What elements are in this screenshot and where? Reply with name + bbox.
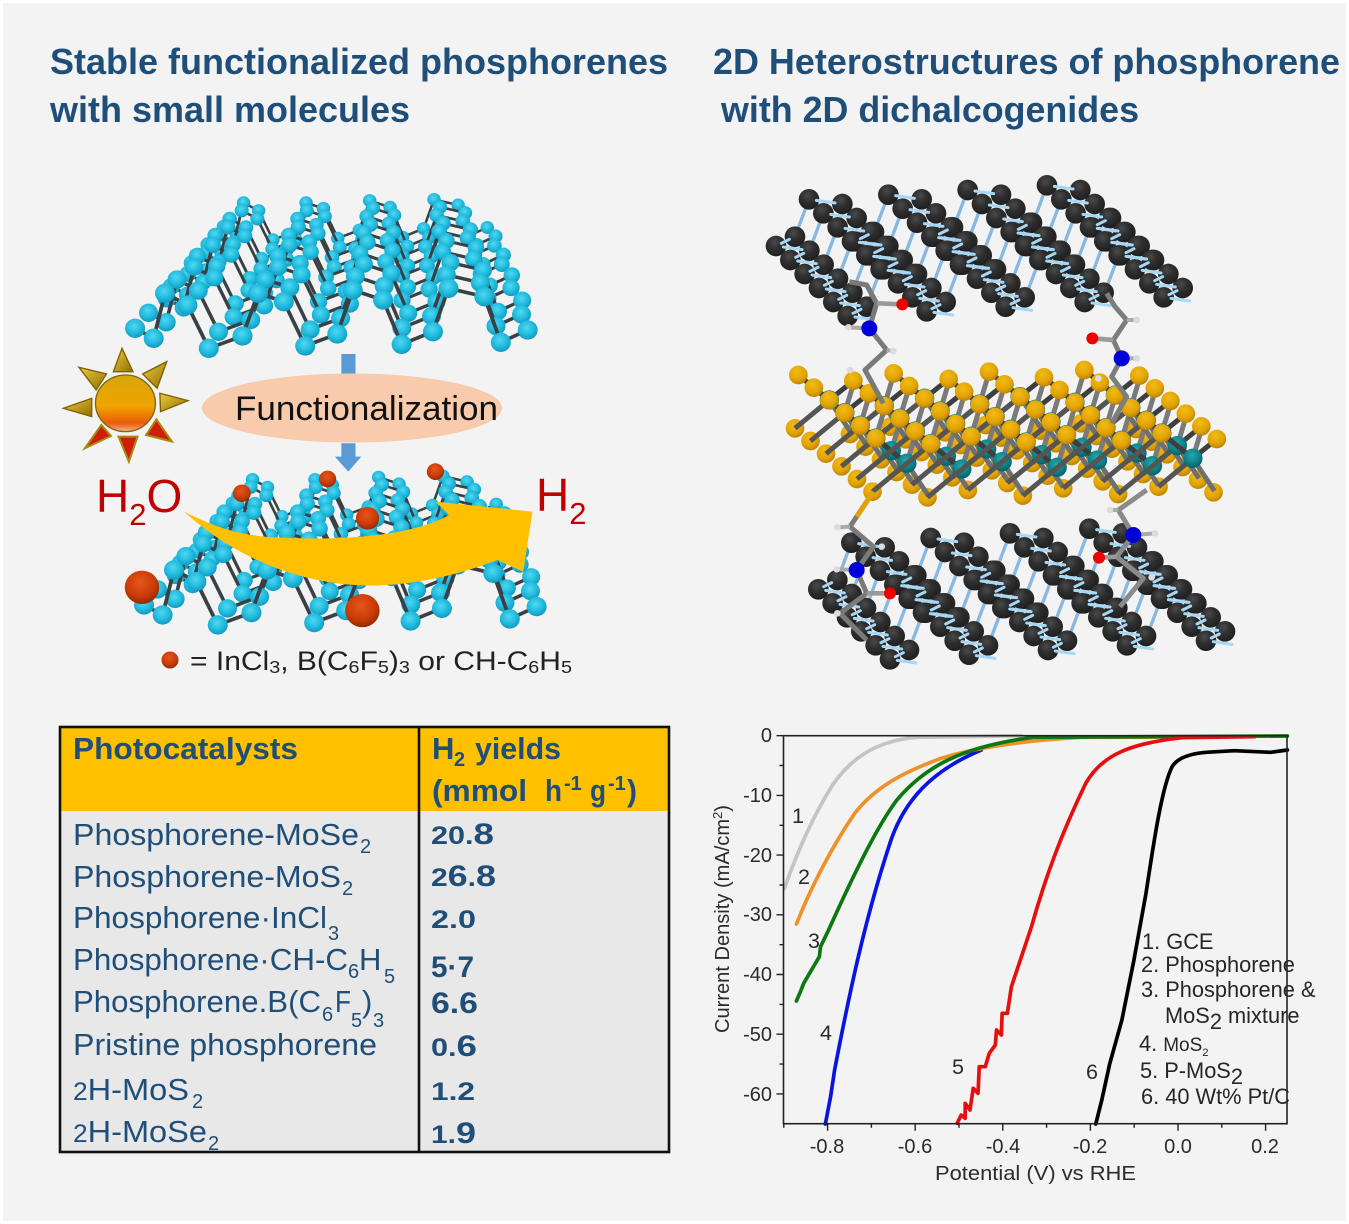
row: Phosphorene.B(C6F5)3: ): [362, 984, 372, 1019]
row: Phosphorene-MoSe2: Phosphorene-MoSe: [73, 817, 359, 852]
MoS2 layer: [786, 361, 1226, 507]
table header: (mmol: [432, 773, 527, 808]
label: functionalization ellipse: [202, 374, 502, 442]
curve 4: MoS2: [825, 750, 981, 1124]
row: Phosphorene-MoS2: 2: [342, 878, 353, 900]
curve number labels: 6: [1086, 1060, 1098, 1084]
curve 1: GCE: [784, 736, 1021, 888]
row: Phosphorene.B(C6F5)3: [73, 984, 478, 1032]
row: Phosphorene-MoS2: [73, 859, 496, 900]
legend: red sphere molecules: 3: [399, 657, 410, 677]
chart legend: mixture: [1222, 1003, 1299, 1028]
table frame: [60, 727, 669, 1152]
bottom phosphorene sheet: [808, 518, 1235, 670]
legend: red sphere molecules: = InCl: [190, 646, 260, 676]
row: Phosphorene-MoSe2: 2: [360, 836, 371, 858]
y axis labels: -10: [743, 785, 772, 807]
row: Phosphorene CH-C6H5: Phosphorene·CH-C: [73, 942, 348, 977]
curve number labels: 4: [820, 1021, 832, 1045]
arrow: water to hydrogen: [184, 502, 533, 586]
row: Phosphorene InCl3: Phosphorene·InCl: [73, 900, 327, 935]
x axis labels: -0.6: [898, 1136, 932, 1158]
legend: red sphere molecules: ): [389, 646, 399, 676]
table header: H: [432, 731, 454, 766]
chart legend: 3. Phosphorene &: [1141, 977, 1316, 1002]
row: Phosphorene-MoS2: 26.8: [431, 860, 496, 893]
label: H2O: 2: [129, 497, 146, 532]
row: 2H-MoS2: 2: [192, 1091, 203, 1113]
row: Phosphorene-MoS2: Phosphorene-MoS: [73, 859, 341, 894]
x axis labels: -0.2: [1073, 1136, 1107, 1158]
label: H2: H: [536, 469, 569, 521]
chart: current density vs potential: [710, 725, 1316, 1185]
y axis labels: -20: [743, 845, 772, 867]
curve number labels: 1: [792, 804, 804, 828]
curve 6: Pt/C: [1096, 750, 1287, 1124]
curves: [784, 736, 1287, 1124]
title: right heading: 2D Heterostructures of phosphorene: [713, 41, 1340, 82]
row: Pristine phosphorene: 0.6: [431, 1030, 477, 1063]
y axis labels: -40: [743, 964, 772, 986]
row: Phosphorene CH-C6H5: [73, 942, 474, 988]
x axis labels: -0.8: [810, 1136, 844, 1158]
pristine phosphorene sheet: [125, 193, 538, 358]
label: functionalization ellipse: Functionalization: [235, 390, 498, 428]
row: 2H-MoSe2: 2: [208, 1133, 219, 1155]
linker molecules: upper: [845, 282, 1140, 423]
legend: red sphere molecules: , B(C: [280, 646, 349, 676]
row: Phosphorene.B(C6F5)3: 6: [322, 1004, 333, 1026]
row: Pristine phosphorene: Pristine phosphorene: [73, 1027, 377, 1062]
curve number labels: 3: [808, 929, 820, 953]
row: Phosphorene CH-C6H5: 5·7: [431, 951, 474, 984]
row: Phosphorene.B(C6F5)3: F: [335, 984, 351, 1019]
title: left heading: [49, 41, 668, 130]
legend: red sphere molecules: 6: [349, 657, 360, 677]
y axis title: ): [712, 805, 734, 812]
table header: 2: [454, 749, 465, 771]
row: 2H-MoS2: 2H-MoS: [73, 1072, 189, 1107]
x axis labels: -0.4: [986, 1136, 1020, 1158]
row: 2H-MoS2: 1.2: [431, 1078, 475, 1106]
chart legend: 1. GCE: [1142, 929, 1213, 954]
y axis labels: [743, 725, 772, 1106]
legend: red sphere molecules: or CH-C: [410, 646, 528, 676]
curve number labels: 2: [798, 865, 810, 889]
row: 2H-MoSe2: [73, 1114, 476, 1155]
legend: red sphere molecules: 5: [561, 657, 572, 677]
panel: functionalization schematic: [63, 193, 586, 677]
row: Phosphorene.B(C6F5)3: Phosphorene.B(C: [73, 984, 321, 1019]
x axis title: Potential (V) vs RHE: [935, 1163, 1136, 1185]
chart legend: 2. Phosphorene: [1141, 952, 1295, 977]
chart legend: MoS: [1165, 1003, 1210, 1028]
table header: [60, 727, 669, 811]
row: 2H-MoSe2: 2H-MoSe: [73, 1114, 207, 1149]
table header: g: [590, 773, 606, 808]
y axis labels: -50: [743, 1024, 772, 1046]
x axis labels: 0.2: [1251, 1136, 1279, 1158]
y axis labels: -60: [743, 1084, 772, 1106]
row: Phosphorene.B(C6F5)3: 3: [373, 1010, 384, 1032]
x axis labels: [810, 1136, 1279, 1158]
row: 2H-MoS2: [73, 1072, 475, 1113]
curve 2: phosphorene: [796, 737, 1254, 924]
row: Phosphorene InCl3: 3: [328, 923, 339, 945]
y axis labels: 0: [761, 725, 772, 747]
label: H2O: O: [146, 470, 182, 522]
row: Phosphorene-MoSe2: 20. 8: [431, 818, 494, 851]
table body background: [60, 727, 669, 1152]
table header: ): [627, 773, 637, 808]
legend: red sphere molecules: H: [539, 646, 561, 676]
chart legend: 6. 40 Wt% Pt/C: [1141, 1084, 1290, 1109]
table header: -1: [608, 773, 626, 795]
legend: red sphere molecules: 3: [269, 657, 280, 677]
title: right heading: with 2D dichalcogenides: [720, 89, 1139, 130]
row: Phosphorene.B(C6F5)3: 6.6: [431, 987, 478, 1020]
table: photocatalyst hydrogen yields: [60, 727, 669, 1155]
y axis labels: -30: [743, 904, 772, 926]
curve 5: P-MoS2: [957, 737, 1254, 1123]
row: Phosphorene InCl3: [73, 900, 476, 945]
table header: yields: [475, 731, 561, 766]
row: Phosphorene CH-C6H5: 6: [348, 961, 359, 983]
y axis title: 2: [710, 812, 725, 819]
functionalized phosphorene sheet: [125, 463, 547, 635]
y axis title: Current Density (mA/cm: [712, 820, 734, 1033]
top phosphorene sheet: [766, 175, 1193, 326]
legend: red sphere molecules: 6: [528, 657, 539, 677]
curve 3: mixture: [796, 736, 1287, 1001]
table header: h: [545, 773, 562, 808]
table header: -1: [564, 773, 582, 795]
title: left heading: with small molecules: [49, 89, 410, 130]
axes: [776, 736, 1287, 1131]
chart legend: 2: [1202, 1047, 1208, 1059]
legend: red sphere molecules: [162, 646, 572, 677]
label: H2: 2: [569, 496, 586, 531]
chart legend: [1139, 929, 1316, 1109]
title: right heading: [713, 41, 1340, 130]
chart legend: 5. P-MoS: [1140, 1058, 1231, 1083]
row: Phosphorene CH-C6H5: 5: [384, 966, 395, 988]
legend: red sphere molecules: F: [360, 646, 378, 676]
row: Phosphorene InCl3: 2.0: [431, 906, 476, 934]
row: Phosphorene CH-C6H5: H: [359, 942, 381, 977]
icon: sun: [63, 348, 188, 462]
row: Phosphorene.B(C6F5)3: 5: [351, 1010, 362, 1032]
chart legend: 2: [1210, 1009, 1222, 1034]
chart legend: 4. MoS: [1139, 1031, 1202, 1056]
arrow: functionalization: [335, 354, 361, 472]
label: H2O: H: [96, 470, 129, 522]
curve number labels: [792, 804, 1098, 1084]
title: left heading: Stable functionalized phosphorenes: [50, 41, 668, 82]
chart legend: 2: [1231, 1064, 1243, 1089]
row: 2H-MoSe2: 1.9: [431, 1117, 476, 1150]
panel: heterostructure model: [766, 175, 1235, 670]
row: Phosphorene-MoSe2: [73, 817, 494, 858]
table header: Photocatalysts: [73, 731, 298, 766]
linker molecules: lower: [833, 490, 1158, 640]
legend: red sphere molecules: 5: [378, 657, 389, 677]
curve number labels: 5: [952, 1055, 964, 1079]
x axis labels: 0.0: [1164, 1136, 1192, 1158]
